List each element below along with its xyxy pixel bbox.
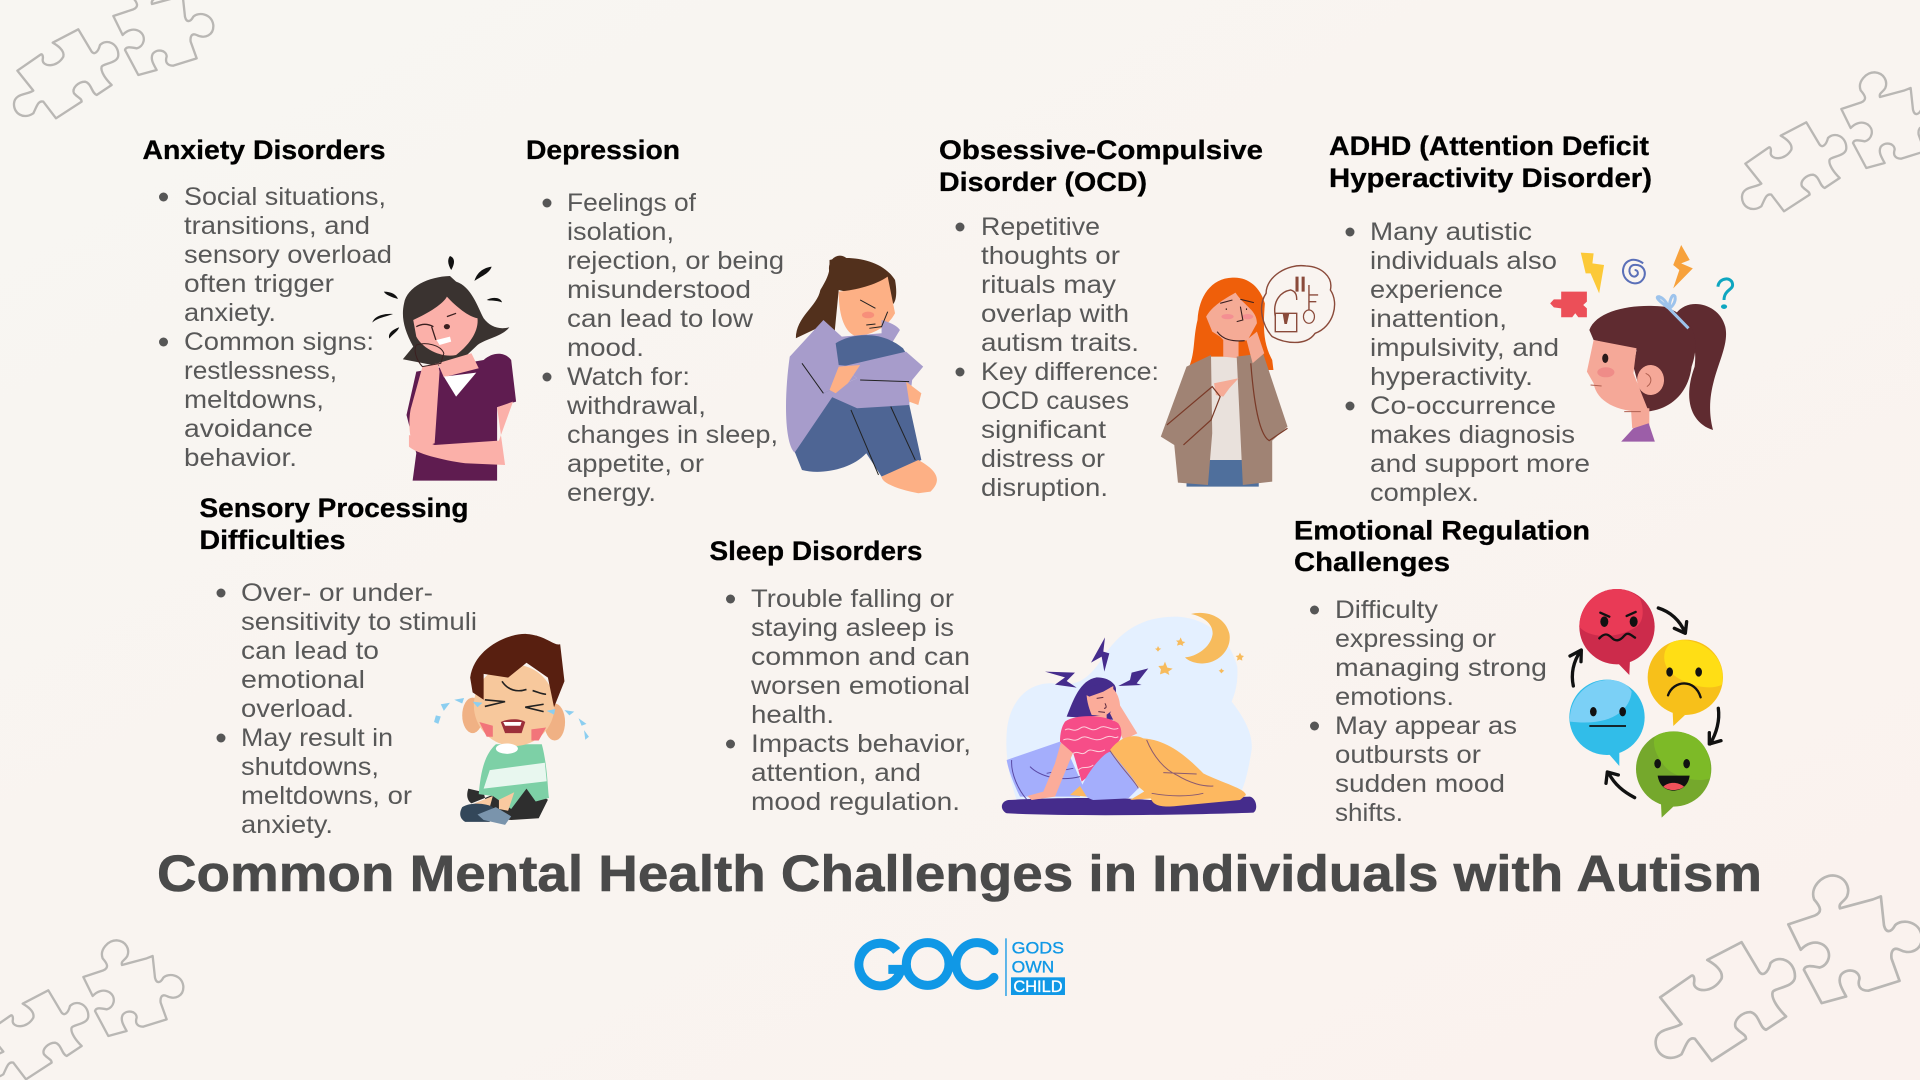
text block: sensory bullets: meltdowns, or — [241, 782, 412, 810]
text block: depression bullets: withdrawal, — [566, 392, 706, 420]
icon: crying boy — [434, 634, 589, 825]
heading: depression: Depression — [526, 135, 680, 165]
text block: depression bullets: energy. — [567, 479, 656, 507]
heading: emotional regulation challenges: Emotional Regulation — [1294, 516, 1590, 546]
panel: depression — [526, 135, 937, 507]
text block: OCD bullets — [956, 213, 1159, 502]
text block: ADHD bullets: individuals also — [1370, 247, 1557, 275]
text block: emotional bullets — [1310, 596, 1547, 827]
logo: Gods Own Child: GODS — [1012, 938, 1064, 957]
logo: Gods Own Child — [859, 938, 1065, 996]
text block: OCD bullets: Key difference: — [981, 358, 1159, 386]
heading: sensory processing difficulties: Difficulties — [200, 525, 346, 555]
text block: emotional bullets: expressing or — [1335, 625, 1496, 653]
text block: depression bullets: rejection, or being — [567, 247, 784, 275]
decoration: puzzle pieces top right — [1742, 72, 1920, 211]
icon: anxious woman — [372, 256, 516, 481]
decoration: puzzle pieces bottom right — [1656, 875, 1920, 1061]
text block: sleep bullets — [726, 585, 971, 816]
text block: emotional bullets: sudden mood — [1335, 770, 1505, 798]
text block: sensory bullets: May result in — [241, 724, 393, 752]
text block: OCD bullets: significant — [981, 416, 1106, 444]
text block: emotional bullets: outbursts or — [1335, 741, 1481, 769]
panel: emotional regulation — [1294, 516, 1723, 827]
heading: obsessive-compulsive disorder — [939, 135, 1263, 197]
text block: ADHD bullets: and support more — [1370, 450, 1590, 478]
text block: depression bullets: can lead to low — [567, 305, 754, 333]
text block: anxiety bullets: avoidance — [184, 415, 313, 443]
text block: ADHD bullets: hyperactivity. — [1370, 363, 1533, 391]
text block: anxiety bullets: Social situations, — [184, 183, 386, 211]
text block: OCD bullets: distress or — [981, 445, 1105, 473]
panel: anxiety disorders — [142, 135, 516, 481]
text block: sensory bullets — [216, 579, 477, 839]
heading: ADHD: ADHD (Attention Deficit — [1329, 131, 1649, 161]
text block: sensory bullets: sensitivity to stimuli — [241, 608, 477, 636]
heading: sensory processing difficulties — [200, 493, 468, 555]
title: Common Mental Health Challenges in Individuals with Autism — [157, 845, 1762, 902]
text block: depression bullets: Feelings of — [567, 189, 696, 217]
text block: emotional bullets: May appear as — [1335, 712, 1517, 740]
text block: sleep bullets: Trouble falling or — [751, 585, 954, 613]
text block: sensory bullets: Over- or under- — [241, 579, 433, 607]
text block: OCD bullets: Repetitive — [981, 213, 1100, 241]
text block: emotional bullets: shifts. — [1335, 799, 1403, 827]
text block: sleep bullets: staying asleep is — [751, 614, 954, 642]
text block: depression bullets: appetite, or — [567, 450, 704, 478]
text block: OCD bullets: autism traits. — [981, 329, 1139, 357]
text block: sleep bullets: worsen emotional — [750, 672, 970, 700]
icon: worried woman with thought bubble — [1161, 266, 1335, 487]
text block: sleep bullets: health. — [751, 701, 834, 729]
text block: depression bullets: Watch for: — [567, 363, 690, 391]
text block: anxiety bullets — [159, 183, 392, 472]
logo: Gods Own Child: CHILD — [1013, 977, 1063, 996]
icon: cycle of four emotion speech bubbles — [1569, 589, 1723, 818]
text block: sleep bullets: Impacts behavior, — [751, 730, 971, 758]
text block: OCD bullets: disruption. — [981, 474, 1108, 502]
text block: sensory bullets: overload. — [241, 695, 354, 723]
decoration: puzzle pieces top left — [14, 0, 213, 118]
heading: sleep disorders: Sleep Disorders — [710, 536, 922, 566]
panel: sleep disorders — [710, 536, 1256, 816]
text block: sleep bullets: mood regulation. — [751, 788, 960, 816]
text block: ADHD bullets — [1346, 218, 1590, 507]
heading: sensory processing difficulties: Sensory Processing — [200, 493, 468, 523]
text block: emotional bullets: Difficulty — [1335, 596, 1439, 624]
icon: distracted girl with ponytail — [1550, 245, 1733, 442]
text block: ADHD bullets: Co-occurrence — [1370, 392, 1556, 420]
text block: ADHD bullets: experience — [1370, 276, 1503, 304]
text block: ADHD bullets: Many autistic — [1370, 218, 1532, 246]
text block: OCD bullets: OCD causes — [981, 387, 1129, 415]
text block: depression bullets — [542, 189, 784, 507]
text block: sensory bullets: can lead to — [241, 637, 379, 665]
heading: ADHD: Hyperactivity Disorder) — [1329, 163, 1652, 193]
text block: sensory bullets: anxiety. — [241, 811, 333, 839]
text block: ADHD bullets: makes diagnosis — [1370, 421, 1575, 449]
text block: anxiety bullets: anxiety. — [184, 299, 276, 327]
text block: depression bullets: mood. — [567, 334, 644, 362]
text block: anxiety bullets: sensory overload — [184, 241, 392, 269]
icon: sad girl hugging knees — [786, 256, 937, 493]
text block: anxiety bullets: meltdowns, — [184, 386, 324, 414]
panel: sensory processing — [200, 493, 589, 839]
panel: ADHD — [1329, 131, 1733, 507]
heading: emotional regulation challenges: Challenges — [1294, 547, 1450, 577]
text block: ADHD bullets: inattention, — [1370, 305, 1507, 333]
text block: sleep bullets: attention, and — [751, 759, 921, 787]
text block: depression bullets: misunderstood — [567, 276, 751, 304]
text block: emotional bullets: managing strong — [1335, 654, 1547, 682]
text block: anxiety bullets: Common signs: — [184, 328, 374, 356]
heading: emotional regulation challenges — [1294, 516, 1590, 577]
heading: ADHD — [1329, 131, 1652, 193]
text block: sensory bullets: emotional — [241, 666, 365, 694]
heading: anxiety disorders: Anxiety Disorders — [142, 135, 386, 165]
text block: ADHD bullets: complex. — [1370, 479, 1479, 507]
decoration: puzzle pieces bottom left — [0, 940, 183, 1079]
panel: OCD — [939, 135, 1335, 502]
text block: anxiety bullets: restlessness, — [184, 357, 337, 385]
text block: emotional bullets: emotions. — [1335, 683, 1454, 711]
logo: Gods Own Child: OWN — [1012, 957, 1054, 976]
text block: depression bullets: isolation, — [567, 218, 674, 246]
text block: sensory bullets: shutdowns, — [241, 753, 379, 781]
text block: anxiety bullets: behavior. — [184, 444, 297, 472]
heading: obsessive-compulsive disorder: Obsessive-Compulsive — [939, 135, 1263, 165]
text block: ADHD bullets: impulsivity, and — [1370, 334, 1559, 362]
text block: OCD bullets: overlap with — [981, 300, 1129, 328]
heading: obsessive-compulsive disorder: Disorder (OCD) — [939, 167, 1147, 197]
text block: anxiety bullets: often trigger — [184, 270, 334, 298]
text block: OCD bullets: thoughts or — [981, 242, 1120, 270]
text block: OCD bullets: rituals may — [981, 271, 1117, 299]
text block: depression bullets: changes in sleep, — [567, 421, 778, 449]
text block: sleep bullets: common and can — [751, 643, 970, 671]
icon: woman awake in bed under moon — [1002, 613, 1256, 815]
text block: anxiety bullets: transitions, and — [184, 212, 370, 240]
